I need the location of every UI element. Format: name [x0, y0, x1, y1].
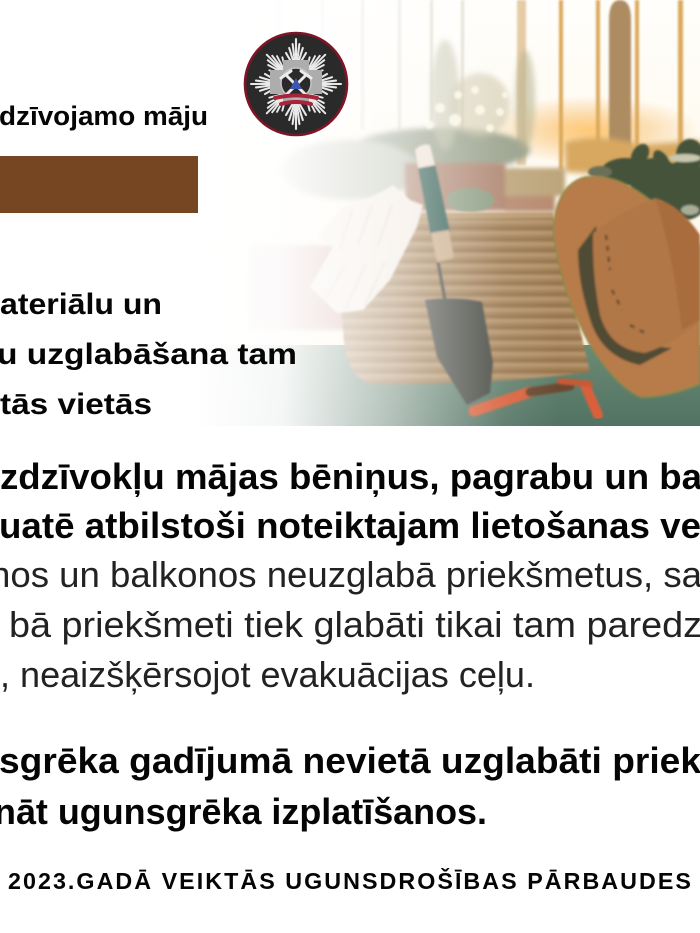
cross [270, 60, 322, 104]
heading: materials storage: tās vietās [0, 388, 152, 421]
cactus [609, 0, 631, 155]
crossed hammers [281, 71, 311, 95]
red ribbon [275, 96, 317, 104]
star rays [251, 39, 341, 129]
brown bar [0, 156, 198, 213]
text block: main instructions: nos un balkonos neuzglabā priekšmetus, sa [0, 554, 700, 595]
garden trowel [415, 145, 493, 405]
heading: materials storage: u uzglabāšana tam [0, 338, 297, 371]
text block: main instructions: , neaizšķērsojot evakuācijas ceļu. [0, 654, 535, 695]
text block: fire warning: nāt ugunsgrēka izplatīšanos. [0, 791, 487, 832]
ground [200, 345, 700, 426]
right leaves [588, 139, 700, 220]
window bars [275, 0, 683, 170]
text block: main instructions: zdzīvokļu mājas bēniņus, pagrabu un ba [0, 456, 700, 497]
text block: main instructions [0, 456, 700, 695]
footer caption: 2023.GADĀ VEIKTĀS UGUNSDROŠĪBAS PĀRBAUDES [8, 867, 693, 894]
heading: materials storage: ateriālu un [0, 288, 162, 321]
white fade overlay [190, 0, 560, 426]
background foliage and bokeh [280, 40, 535, 200]
text block: main instructions: uatē atbilstoši noteiktajam lietošanas ve [0, 505, 700, 546]
text block: main instructions: bā priekšmeti tiek glabāti tikai tam paredz [9, 604, 700, 645]
heading: materials storage [0, 288, 297, 421]
white gardening gloves [310, 185, 423, 313]
hillside horizon [565, 138, 700, 180]
basket [340, 212, 590, 384]
sunset glow [480, 96, 700, 164]
background photo: garden tools on a sunlit balcony [190, 0, 700, 426]
text block: fire warning [0, 740, 700, 832]
background terracotta pots [250, 163, 565, 330]
red pruning shears [474, 381, 598, 415]
text block: fire warning: sgrēka gadījumā nevietā uzglabāti priek [0, 740, 700, 781]
straw hat [553, 176, 700, 397]
logo: fire service badge [245, 33, 347, 135]
blue triangle [290, 78, 302, 89]
background plant next to pots [446, 188, 494, 212]
subtitle: dzīvojamo māju: dzīvojamo māju [0, 101, 208, 131]
